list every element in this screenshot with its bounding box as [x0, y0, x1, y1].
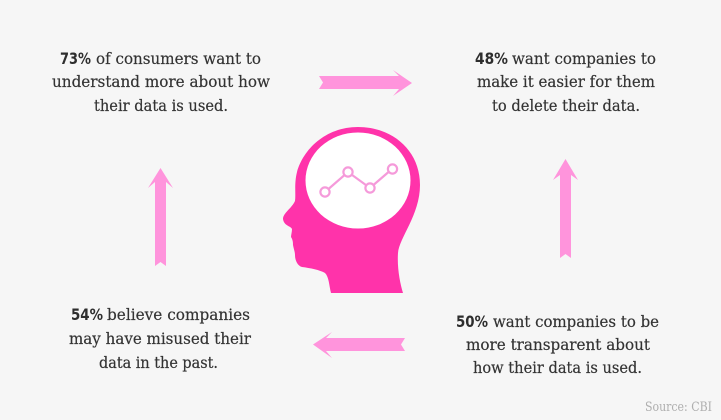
- text block: 54% believe companies: data in the past.: [99, 353, 218, 372]
- text block: 73% of consumers: 73%: [60, 49, 91, 68]
- text block: 50% want companies: want companies to be: [493, 312, 659, 331]
- head silhouette: [283, 127, 420, 293]
- text block: 54% believe companies: [69, 305, 251, 372]
- line chart: [320, 164, 397, 197]
- text block: 48% want companies: 48%: [475, 49, 508, 68]
- text block: 73% of consumers: understand more about how: [52, 72, 270, 91]
- text block: 50% want companies: more transparent about: [466, 335, 651, 354]
- arrow: left, pointing up: [148, 168, 173, 266]
- text block: 48% want companies: want companies to: [512, 49, 656, 68]
- text block: 73% of consumers: [52, 49, 270, 115]
- text block: 48% want companies: [475, 49, 656, 115]
- arrow: bottom, pointing left: [313, 332, 405, 358]
- icon: head with chart: [283, 127, 420, 293]
- text block: 54% believe companies: believe companies: [107, 305, 250, 324]
- text block: 48% want companies: to delete their data.: [492, 96, 640, 115]
- text block: 54% believe companies: 54%: [71, 305, 103, 324]
- text block: 48% want companies: make it easier for them: [477, 72, 655, 91]
- text block: 50% want companies: 50%: [456, 312, 488, 331]
- text block: 50% want companies: [456, 312, 659, 377]
- text block: 54% believe companies: may have misused their: [69, 329, 251, 348]
- text block: 73% of consumers: of consumers want to: [96, 49, 261, 68]
- text block: 73% of consumers: their data is used.: [94, 96, 228, 115]
- text block: 50% want companies: how their data is used.: [473, 358, 642, 377]
- brain area: [306, 132, 410, 228]
- arrow: top, pointing right: [319, 70, 412, 96]
- arrow: right, pointing up: [553, 159, 578, 258]
